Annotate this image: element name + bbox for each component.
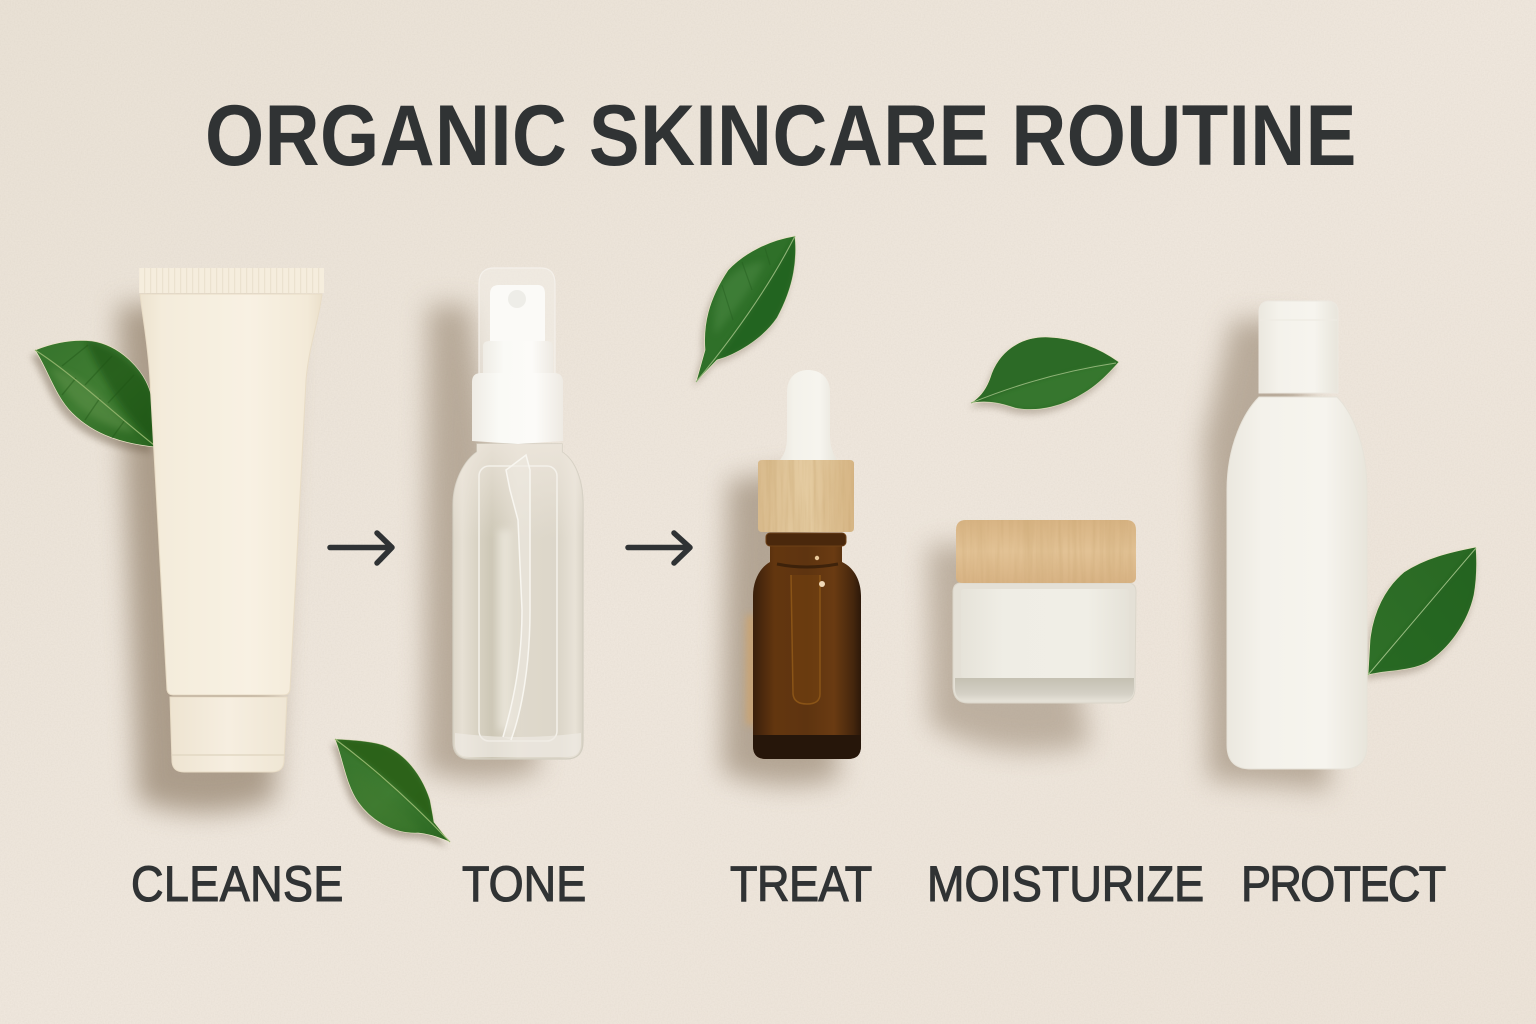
pump neck — [483, 341, 553, 373]
spray collar — [472, 373, 563, 444]
bottle glass — [453, 444, 583, 759]
arrow: tone to treat — [628, 533, 690, 563]
tube cap — [170, 697, 287, 772]
leaf: right of bottle — [1366, 547, 1477, 680]
clear overcap — [479, 268, 555, 375]
liquid highlight — [498, 530, 512, 730]
bottle body — [1227, 397, 1367, 769]
amber highlight — [819, 581, 825, 587]
arrow: cleanse to tone — [330, 533, 392, 563]
label: tone: TONE — [462, 857, 586, 913]
label: moisturize: MOISTURIZE — [927, 857, 1204, 913]
tube cap line — [172, 754, 285, 756]
tube crimp — [139, 268, 324, 293]
product: cream jar — [953, 520, 1136, 703]
amber neck lip — [766, 533, 846, 546]
amber shoulder band — [777, 564, 838, 567]
glass top fade — [453, 444, 583, 759]
bottle cap — [1259, 301, 1338, 393]
product: white protect bottle — [1227, 301, 1367, 769]
amber dark base — [753, 735, 861, 759]
dropper bulb — [780, 370, 837, 460]
product: cleanser tube — [139, 268, 324, 772]
product shadows — [118, 305, 1330, 812]
leaf: left of tube — [31, 340, 155, 453]
title: ORGANIC SKINCARE ROUTINE — [205, 88, 1356, 184]
bottle cap seam — [1260, 319, 1337, 321]
amber glow on left edge — [747, 615, 755, 725]
inner pipette — [791, 575, 820, 704]
pump nozzle — [490, 285, 545, 342]
label: protect: PROTECT — [1241, 857, 1446, 913]
amber glass — [753, 540, 861, 759]
inner liquid wall — [479, 466, 557, 741]
dip tube — [503, 455, 530, 740]
jar glass — [953, 583, 1136, 703]
product: spray toner bottle — [453, 268, 583, 759]
product: amber dropper bottle — [747, 370, 861, 759]
nozzle hole — [508, 290, 526, 308]
base of glass — [455, 733, 581, 757]
jar base — [955, 678, 1134, 701]
jar lid — [956, 520, 1136, 583]
step labels — [131, 857, 1446, 913]
label: treat: TREAT — [730, 857, 872, 913]
wood collar — [758, 460, 854, 532]
leaf: top centre — [693, 236, 796, 387]
leaf: bottom between tube and spray — [332, 739, 450, 847]
tube body — [140, 294, 322, 695]
label: cleanse: CLEANSE — [131, 857, 343, 913]
amber neck highlight — [815, 556, 819, 560]
leaf: above jar — [969, 337, 1119, 415]
jar cream — [961, 589, 1129, 678]
